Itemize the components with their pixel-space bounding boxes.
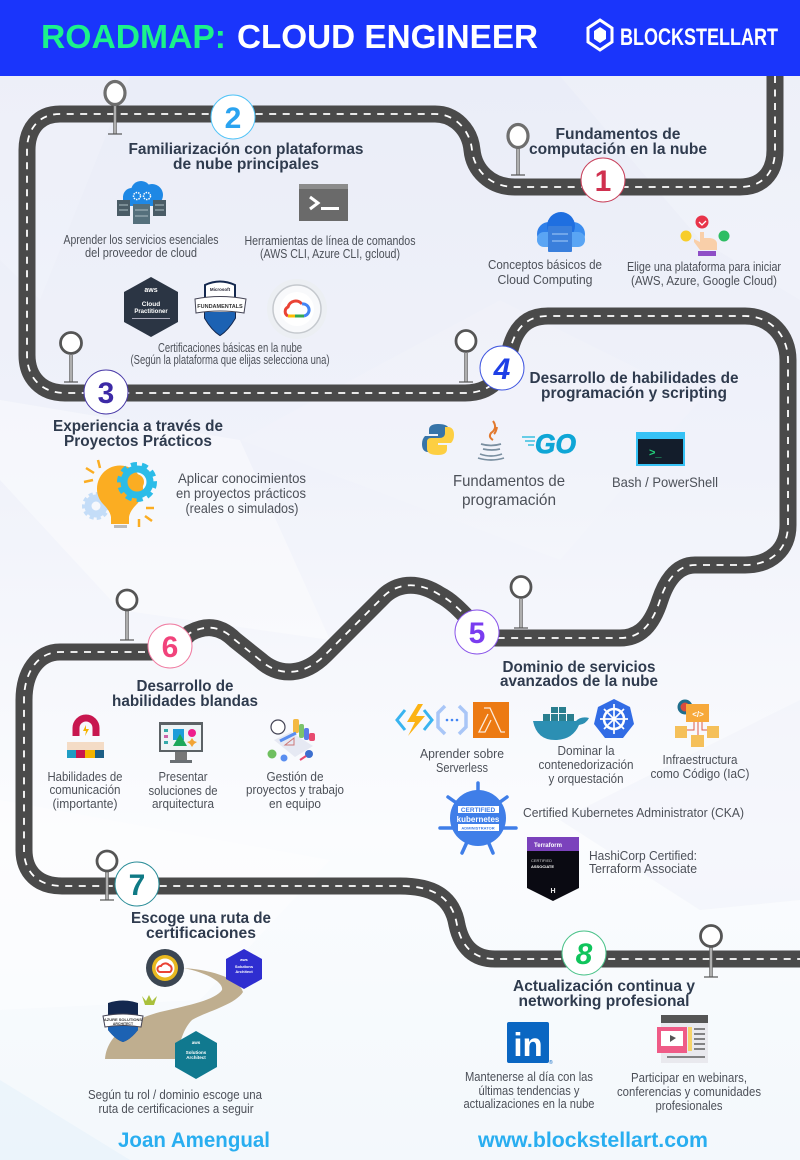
- heading: step 6: habilidades blandas: [112, 693, 258, 710]
- pin 7: [97, 851, 117, 900]
- text: comunicación: Habilidades de: [48, 769, 122, 784]
- text: según tu rol: [88, 1087, 263, 1116]
- badge: AWS solutions architect professional: aws: [192, 1040, 201, 1045]
- badge: Azure solutions architect expert: AZURE SOLUTIONS: [104, 1017, 142, 1022]
- heading: step 6: Desarrollo de: [136, 678, 234, 695]
- header banner: [0, 0, 800, 76]
- step badge 6: 6: [162, 631, 178, 664]
- heading: step 3: [53, 418, 223, 450]
- pin 6: [117, 590, 137, 640]
- icon: light bulb and gears: [84, 460, 154, 528]
- badge: CKA kubernetes: ADMINISTRATOR: [461, 826, 495, 830]
- step badge 3: 3: [98, 377, 114, 410]
- badge: Azure solutions architect expert: ARCHITECT: [113, 1022, 134, 1026]
- text: fundamentos de programación: Fundamentos de: [453, 473, 565, 490]
- icon: bash terminal: >_: [649, 447, 662, 459]
- text: conceptos: [488, 257, 602, 287]
- text: Terraform: Terraform Associate: [589, 861, 697, 876]
- step badge 7: 7: [129, 869, 145, 902]
- badge: AWS solutions architect professional: Solutions: [186, 1050, 207, 1055]
- heading: step 5: [500, 659, 658, 690]
- heading: step 3: Experiencia a través de: [53, 418, 223, 435]
- icon: google cloud functions: [438, 706, 466, 734]
- heading: step 7: certificaciones: [146, 925, 256, 942]
- icon: linkedin: [507, 1022, 553, 1066]
- heading: step 2: de nube principales: [173, 156, 319, 173]
- text: webinars: profesionales: [656, 1098, 723, 1113]
- text: webinars: conferencias y comunidades: [617, 1084, 761, 1099]
- icon: cloud computing: [537, 212, 585, 252]
- text: presentar soluciones: soluciones de: [148, 783, 218, 798]
- heading: step 1: [529, 126, 707, 158]
- pin 1: [508, 124, 528, 175]
- text: presentar soluciones: Presentar: [158, 769, 208, 784]
- title: CLOUD ENGINEER: [237, 18, 538, 55]
- footer: author: Joan Amengual: [118, 1129, 270, 1152]
- step badge 7: [115, 862, 159, 906]
- text: aplicar conocimientos: en proyectos prácticos: [176, 485, 306, 501]
- text: serverless: [420, 746, 504, 775]
- text: aplicar conocimientos: Aplicar conocimientos: [178, 470, 306, 486]
- text: CKA: Certified Kubernetes Administrator (CKA): [523, 805, 744, 820]
- icon: magnet people: [67, 718, 104, 758]
- badge: Google Cloud certification: [146, 949, 184, 987]
- text: gestión proyectos: en equipo: [269, 796, 321, 811]
- badge: AWS Cloud Practitioner: [124, 277, 178, 337]
- text: comunicación: comunicación: [50, 782, 120, 797]
- text: certificaciones básicas: Certificaciones básicas en la nube: [158, 340, 302, 355]
- badge: Azure Fundamentals: [195, 282, 246, 335]
- text: serverless: Serverless: [436, 760, 488, 775]
- text: webinars: Participar en webinars,: [631, 1070, 747, 1085]
- badge: CKA kubernetes: kubernetes: [457, 815, 500, 824]
- text: gestión proyectos: proyectos y trabajo: [246, 782, 344, 797]
- step badge 2: [211, 95, 255, 139]
- text: servicios esenciales: [64, 232, 219, 260]
- heading: step 5: Dominio de servicios: [502, 659, 656, 676]
- badge: CKA kubernetes: CERTIFIED: [461, 807, 495, 814]
- text: IaC: Infraestructura: [662, 752, 738, 767]
- pin 4: [456, 330, 476, 382]
- text: conceptos: Conceptos básicos de: [488, 257, 602, 272]
- icon: webinar: [657, 1015, 708, 1063]
- text: contenedorización: contenedorización: [538, 757, 634, 772]
- heading: step 4: programación y scripting: [541, 385, 727, 402]
- badge: Terraform Associate: H: [550, 888, 556, 895]
- badge: AWS Cloud Practitioner: aws: [144, 287, 158, 294]
- illustration: certification path: [105, 968, 243, 1059]
- text: certificaciones básicas: [130, 340, 330, 367]
- step badge 4: [480, 346, 524, 390]
- title: [41, 18, 538, 55]
- icon: infrastructure as code: [675, 701, 719, 747]
- badge: Terraform Associate: CERTIFIED: [531, 858, 552, 863]
- heading: step 4: [530, 370, 739, 402]
- text: mantenerse al día: [464, 1069, 594, 1111]
- icon: docker: [533, 707, 589, 740]
- heading: step 1: Fundamentos de: [556, 126, 681, 143]
- badge: AWS solutions architect associate: aws: [240, 957, 249, 962]
- heading: step 7: [131, 910, 271, 942]
- heading: step 1: computación en la nube: [529, 141, 707, 158]
- text: mantenerse al día: actualizaciones en la nube: [464, 1096, 594, 1111]
- badge: Terraform Associate: Terraform: [534, 843, 562, 849]
- step badge 6: [148, 624, 192, 668]
- step badge 4: 4: [493, 353, 511, 386]
- text: conceptos: Cloud Computing: [498, 272, 592, 287]
- badge: Terraform Associate: ASSOCIATE: [531, 864, 554, 869]
- badge: CKA kubernetes: [440, 783, 516, 853]
- icon: Go: GO: [535, 429, 576, 459]
- icon: cloud servers: [117, 181, 166, 224]
- icon: presentation monitor: [159, 722, 203, 763]
- text: comunicación: (importante): [52, 796, 118, 811]
- icon: linkedin: in: [513, 1026, 543, 1063]
- text: serverless: Aprender sobre: [420, 746, 504, 761]
- step badge 3: [84, 370, 128, 414]
- pin 8: [700, 926, 722, 977]
- text: servicios esenciales: Aprender los servicios esenciales: [64, 232, 219, 247]
- text: servicios esenciales: del proveedor de cloud: [85, 245, 197, 260]
- badge: AWS solutions architect associate: Architect: [235, 969, 253, 974]
- text: contenedorización: [538, 743, 634, 786]
- icon: python: [422, 424, 454, 455]
- step badge 5: [455, 610, 499, 654]
- badge: Azure Fundamentals: Microsoft: [210, 287, 231, 292]
- badge: Google Cloud Digital Leader: [267, 279, 327, 339]
- icon: project management: [268, 719, 315, 762]
- text: elige plataforma: (AWS, Azure, Google Cloud): [631, 273, 777, 288]
- text: IaC: como Código (IaC): [650, 766, 750, 781]
- text: contenedorización: Dominar la: [558, 743, 615, 758]
- pin 5: [511, 576, 531, 628]
- pin 3: [60, 332, 82, 382]
- badge: Azure Fundamentals: FUNDAMENTALS: [197, 304, 243, 310]
- text: presentar soluciones: arquitectura: [152, 796, 215, 811]
- icon: linkedin: ®: [549, 1059, 553, 1066]
- text: contenedorización: y orquestación: [548, 771, 624, 786]
- badge: Terraform Associate: [527, 837, 579, 901]
- text: gestión proyectos: Gestión de: [266, 769, 324, 784]
- icon: infrastructure as code: </>: [692, 710, 704, 719]
- heading: step 2: [128, 141, 364, 173]
- text: certificaciones básicas: (Según la plataforma que elijas selecciona una): [130, 352, 330, 367]
- text: según tu rol: Según tu rol / dominio escoge una: [88, 1087, 263, 1102]
- step badge 1: 1: [595, 165, 611, 198]
- text: mantenerse al día: últimas tendencias y: [478, 1083, 580, 1098]
- text: herramientas: [244, 233, 416, 261]
- icon: java: [478, 421, 504, 460]
- logo: Blockstellart: [588, 20, 778, 51]
- text: bash powershell: Bash / PowerShell: [612, 474, 718, 490]
- text: fundamentos de programación: [453, 473, 565, 509]
- text: elige plataforma: [627, 259, 782, 288]
- icon: command line: [299, 184, 348, 221]
- pin 2: [105, 82, 125, 134]
- text: fundamentos de programación: programación: [462, 492, 556, 509]
- step badge 2: 2: [225, 102, 241, 135]
- badge: AWS solutions architect professional: Architect: [186, 1055, 206, 1060]
- text: herramientas: Herramientas de línea de comandos: [244, 233, 416, 248]
- badge: AWS Cloud Practitioner: Practitioner: [134, 309, 168, 315]
- icon: kubernetes: [594, 699, 634, 738]
- text: herramientas: (AWS CLI, Azure CLI, gcloud): [260, 246, 400, 261]
- heading: step 7: Escoge una ruta de: [131, 910, 271, 927]
- heading: step 4: Desarrollo de habilidades de: [530, 370, 739, 387]
- icon: aws lambda: [473, 702, 509, 738]
- text: aplicar conocimientos: [176, 470, 306, 516]
- icon: azure functions: [397, 704, 432, 736]
- text: Terraform: HashiCorp Certified:: [589, 848, 697, 863]
- text: presentar soluciones: [148, 769, 218, 811]
- step badge 8: [562, 931, 606, 975]
- step badge 5: 5: [469, 617, 485, 650]
- badge: AWS solutions architect professional: [175, 1031, 217, 1079]
- badge: AWS solutions architect associate: [226, 949, 262, 989]
- title: ROADMAP:: [41, 18, 226, 55]
- text: IaC: [650, 752, 750, 781]
- heading: step 5: avanzados de la nube: [500, 673, 658, 690]
- text: Terraform: [589, 848, 697, 876]
- badge: Azure solutions architect expert: [103, 1000, 143, 1042]
- step badge 1: [581, 158, 625, 202]
- heading: step 6: [112, 678, 258, 710]
- text: comunicación: [48, 769, 122, 811]
- badge: AWS solutions architect associate: Solutions: [235, 964, 254, 969]
- text: webinars: [617, 1070, 761, 1113]
- heading: step 2: Familiarización con plataformas: [128, 141, 364, 158]
- icon: bash terminal: [636, 432, 685, 466]
- heading: step 8: networking profesional: [518, 993, 690, 1010]
- text: gestión proyectos: [246, 769, 344, 811]
- text: mantenerse al día: Mantenerse al día con las: [465, 1069, 593, 1084]
- badge: AWS Cloud Practitioner: Cloud: [142, 301, 160, 308]
- text: aplicar conocimientos: (reales o simulados): [186, 500, 298, 516]
- heading: step 8: [513, 978, 695, 1010]
- heading: step 3: Proyectos Prácticos: [64, 433, 212, 450]
- footer: website: www.blockstellart.com: [477, 1129, 708, 1152]
- heading: step 8: Actualización continua y: [513, 978, 695, 995]
- text: según tu rol: ruta de certificaciones a seguir: [98, 1101, 254, 1116]
- step badge 8: 8: [576, 938, 593, 971]
- road: [24, 76, 800, 959]
- icon: choose platform hand: [680, 216, 730, 256]
